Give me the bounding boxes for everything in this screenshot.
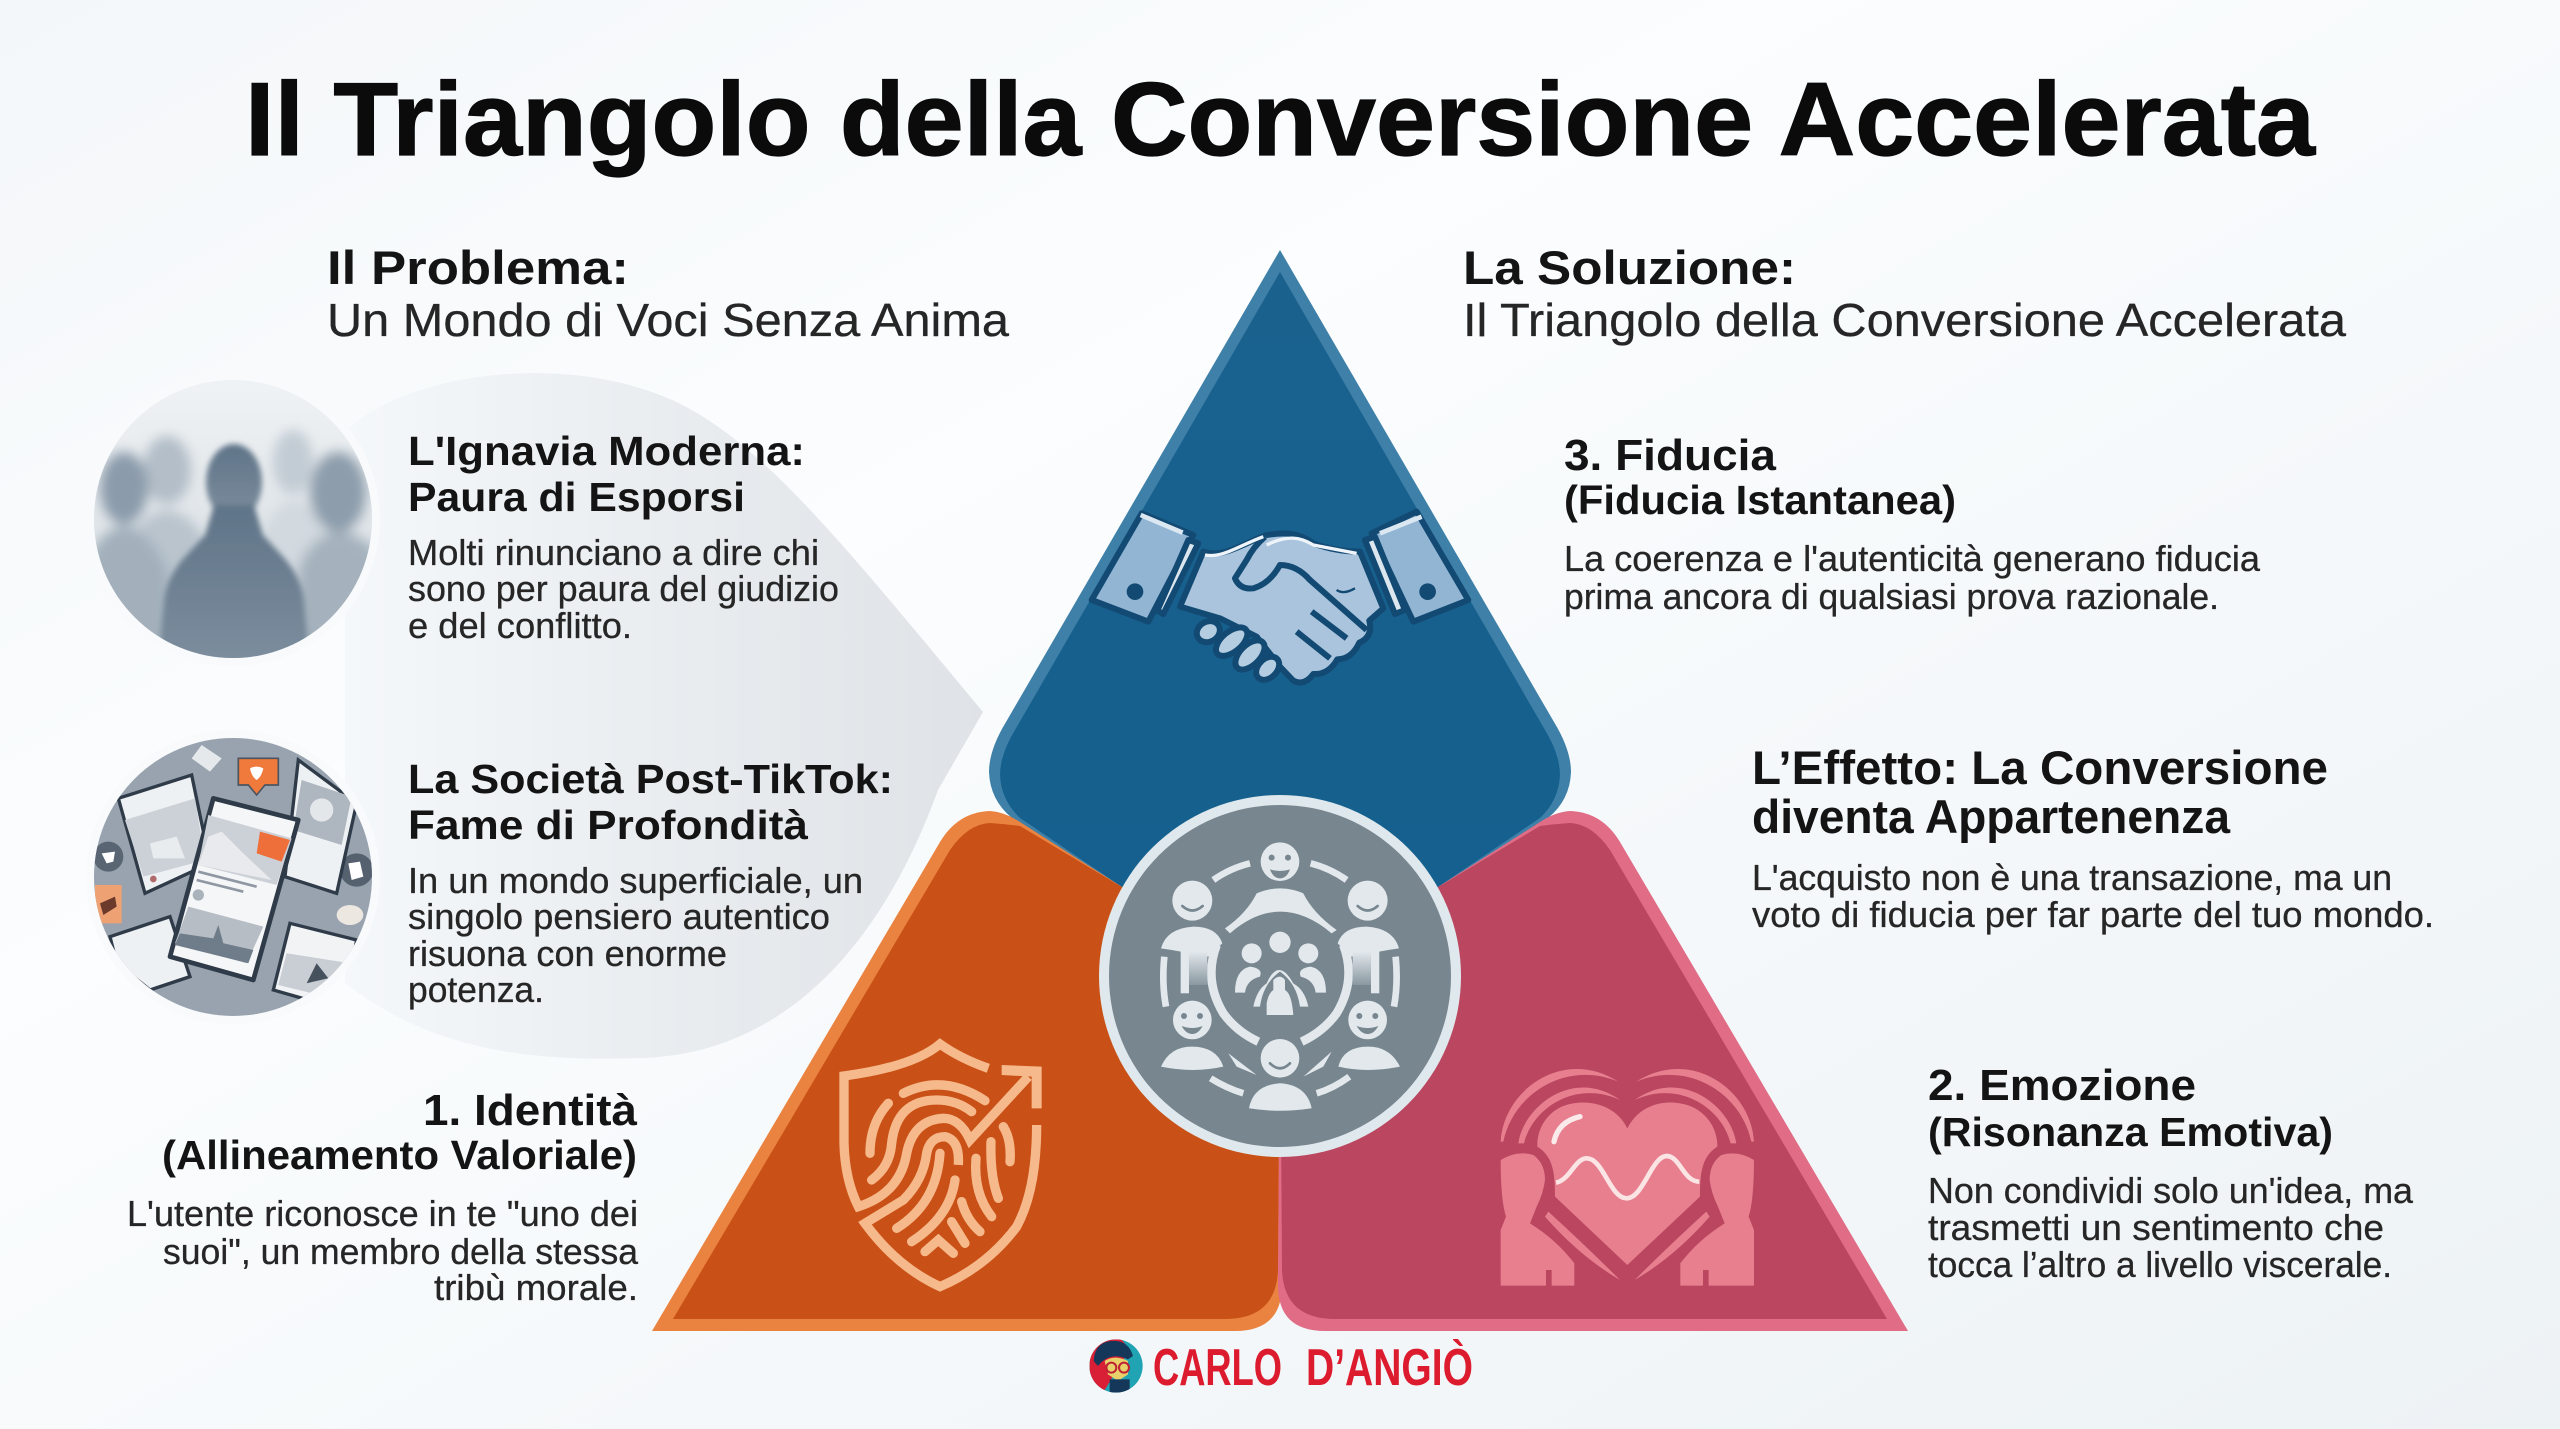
icon: central community circle (1099, 795, 1461, 1157)
panel: pink emotion triangle (1278, 811, 1908, 1331)
text: L'Effetto: L'acquisto non è una transazione, ma un (1752, 857, 2392, 898)
title: Il Triangolo della Conversione Accelerata (245, 62, 2316, 178)
text: 3 Fiducia: La coerenza e l'autenticità generano fiducia (1564, 538, 2261, 579)
text: 1 Identita: (Allineamento Valoriale) (162, 1132, 637, 1178)
text: 2 Emozione: trasmetti un sentimento che (1928, 1207, 2384, 1248)
text: La Societa Post-TikTok (408, 756, 893, 1010)
logo: Carlo D'Angio: CARLO (1153, 1339, 1282, 1397)
panel: problem speech bubble (345, 373, 983, 1059)
panel: orange identity triangle (652, 811, 1282, 1331)
logo: Carlo D'Angio (1090, 1339, 1473, 1397)
text: 2 Emozione: Non condividi solo un'idea, ma (1928, 1170, 2414, 1211)
text: 2 Emozione: tocca l’altro a livello viscerale. (1928, 1244, 2392, 1285)
text: L'Effetto: voto di fiducia per far parte del tuo mondo. (1752, 894, 2434, 935)
heading: problem (327, 241, 1009, 346)
text: L'Effetto (1752, 741, 2434, 935)
text: 3 Fiducia: 3. Fiducia (1564, 431, 1777, 480)
text: 2 Emozione: (Risonanza Emotiva) (1928, 1109, 2333, 1155)
text: 1 Identita: 1. Identità (423, 1086, 638, 1135)
icon: handshake (1092, 512, 1468, 684)
icon: shield with fingerprint and arrow (844, 1044, 1042, 1287)
heading: problem: Il Problema: (327, 241, 629, 294)
text: 1 Identita: suoi", un membro della stessa (163, 1231, 639, 1272)
logo: Carlo D'Angio: D’ANGIÒ (1306, 1339, 1473, 1397)
text: L'Ignavia Moderna: sono per paura del giudizio (408, 568, 839, 609)
text: La Societa Post-TikTok: Fame di Profondità (408, 802, 808, 848)
heading: problem: Un Mondo di Voci Senza Anima (327, 294, 1009, 346)
heading: solution: La Soluzione: (1463, 241, 1796, 294)
heading: solution (1463, 241, 2346, 346)
text: 2 Emozione (1928, 1061, 2414, 1285)
panel: blue trust triangle (989, 250, 1571, 980)
icon: blurred crowd photo (94, 380, 372, 658)
text: 1 Identita (127, 1086, 639, 1308)
text: L'Ignavia Moderna: Molti rinunciano a dire chi (408, 532, 819, 573)
text: La Societa Post-TikTok: potenza. (408, 969, 544, 1010)
text: 2 Emozione: 2. Emozione (1928, 1061, 2196, 1110)
text: La Societa Post-TikTok: La Società Post-TikTok: (408, 756, 893, 802)
text: L'Ignavia Moderna: L'Ignavia Moderna: (408, 428, 805, 474)
text: L'Effetto: L’Effetto: La Conversione (1752, 741, 2328, 794)
icon: heart held by two figures (1501, 1069, 1754, 1286)
text: L'Ignavia Moderna: e del conflitto. (408, 605, 632, 646)
text: 3 Fiducia (1564, 431, 2261, 617)
text: L'Ignavia Moderna (408, 428, 839, 646)
text: L'Ignavia Moderna: Paura di Esporsi (408, 474, 745, 520)
heading: solution: Il Triangolo della Conversione Accelerata (1463, 294, 2346, 346)
text: 3 Fiducia: (Fiducia Istantanea) (1564, 477, 1956, 523)
text: La Societa Post-TikTok: In un mondo superficiale, un (408, 860, 863, 901)
text: La Societa Post-TikTok: risuona con enorme (408, 933, 727, 974)
text: La Societa Post-TikTok: singolo pensiero autentico (408, 896, 830, 937)
text: L'Effetto: diventa Appartenenza (1752, 790, 2231, 843)
text: 3 Fiducia: prima ancora di qualsiasi prova razionale. (1564, 576, 2219, 617)
text: 1 Identita: tribù morale. (434, 1267, 638, 1308)
text: 1 Identita: L'utente riconosce in te "uno dei (127, 1193, 638, 1234)
icon: social media feeds photo (94, 738, 372, 1016)
